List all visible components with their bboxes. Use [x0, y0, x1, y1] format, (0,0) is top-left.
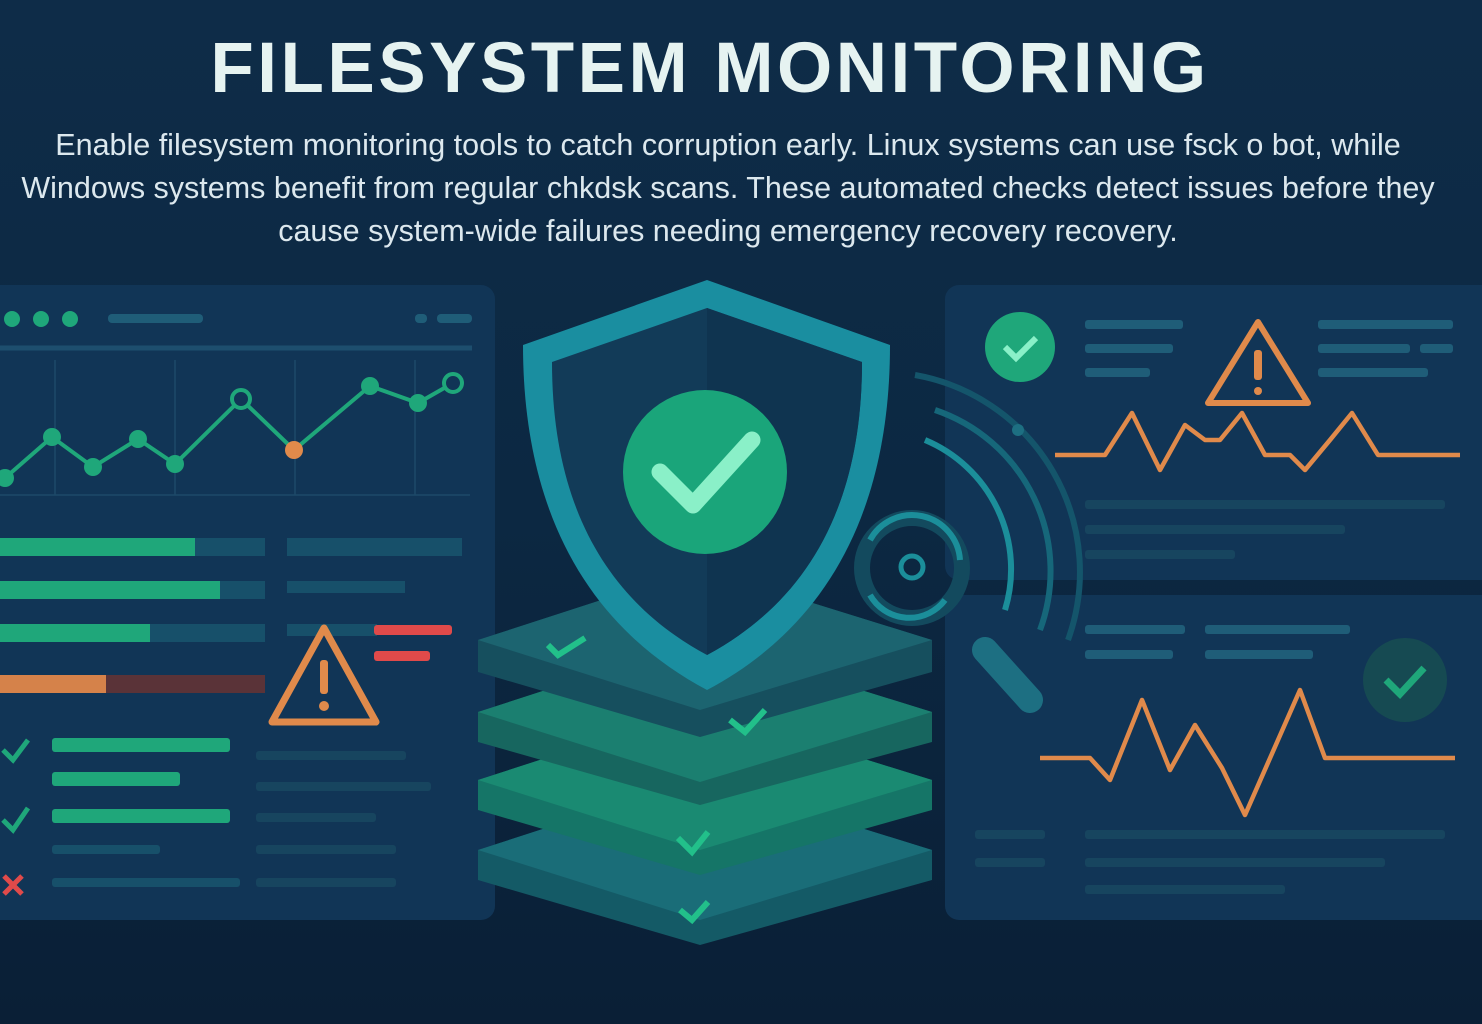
icon: magnifier with signal waves: [862, 375, 1080, 700]
line chart: [0, 374, 462, 487]
panel: right top: [945, 285, 1482, 580]
panel: right bottom: [945, 595, 1482, 920]
text block: description: Windows systems benefit from regular chkdsk scans. These automated checks detect issues before they: [21, 171, 1435, 205]
panel: left dashboard: [0, 285, 495, 920]
icon: warning right: [1208, 322, 1308, 403]
checklist: [3, 738, 431, 894]
icon: disk stack: [478, 568, 932, 945]
icon: shield: [523, 280, 890, 690]
text block: description: [21, 128, 1435, 248]
progress bars: [0, 538, 462, 693]
text block: description: Enable filesystem monitoring tools to catch corruption early. Linux systems can use fsck o bot, while: [55, 128, 1401, 162]
text block: description: cause system-wide failures needing emergency recovery recovery.: [278, 214, 1178, 248]
title: FILESYSTEM MONITORING: [210, 29, 1210, 108]
icon: warning: [272, 625, 452, 722]
